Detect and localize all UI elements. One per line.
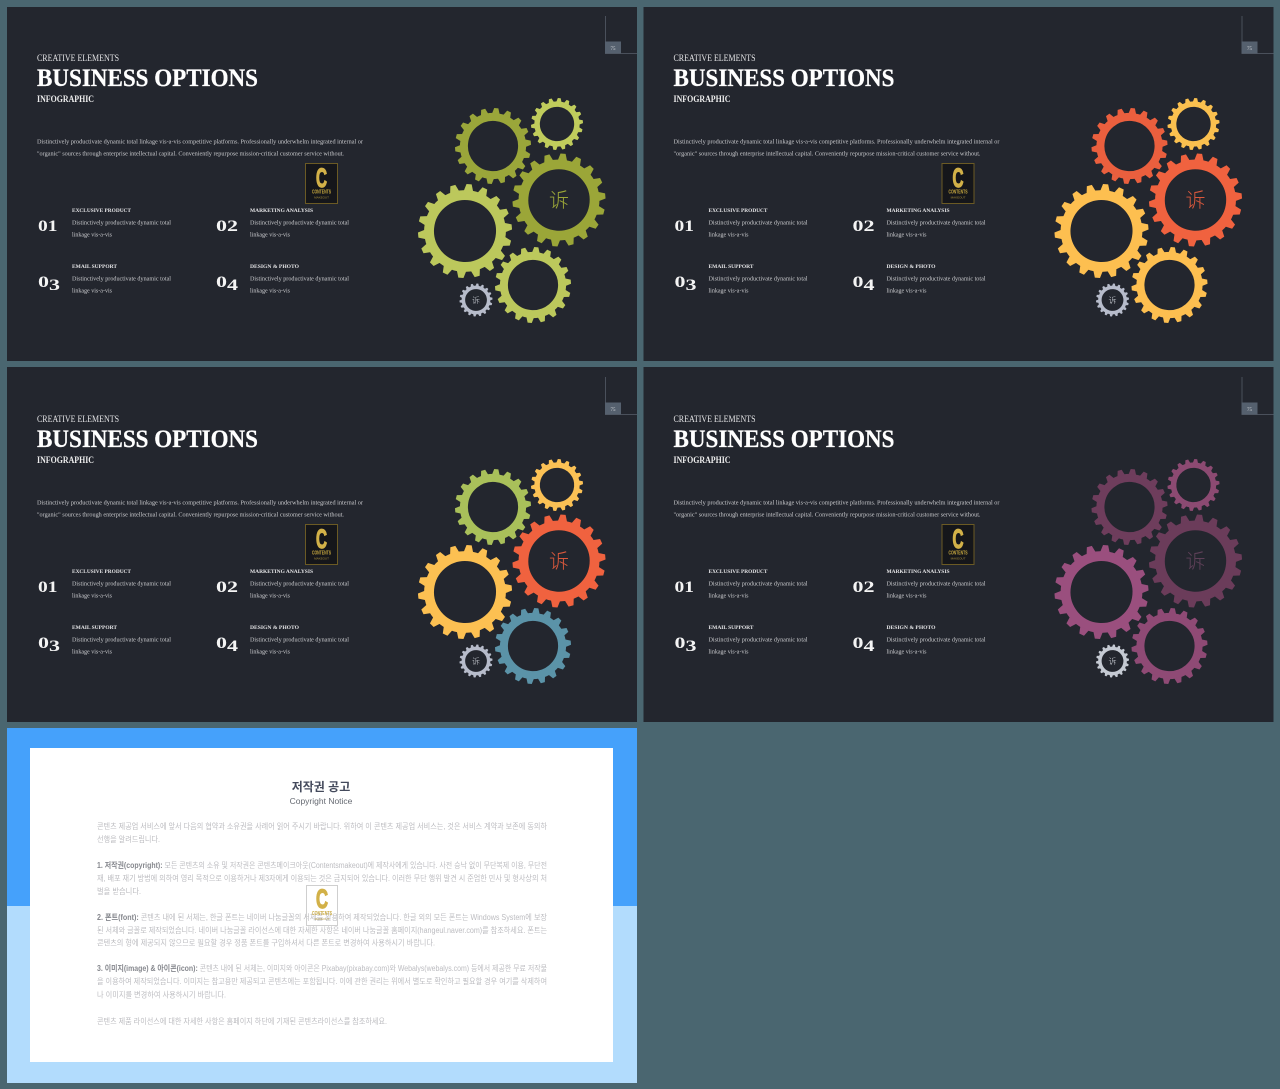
section 1 copyright: 재, 배포 재기 방법에 의하여 영리 목적으로 이용하거나 제3자에게 이용되는 것은 금지되어 있습니다. 이러한 무단 행위 발견 시 준엄한 민사 및 형사상의 처 <box>97 873 547 883</box>
logo <box>942 163 974 204</box>
item 02: MARKETING ANALYSIS <box>250 569 313 575</box>
item 03 <box>674 264 808 294</box>
item 02 <box>852 569 986 600</box>
item 01: EXCLUSIVE PRODUCT <box>72 208 131 214</box>
heading block: BUSINESS OPTIONS <box>37 65 258 92</box>
section 3 image and icon: 나 이미지를 변경하여 사용하시기 바랍니다. <box>97 990 226 1000</box>
section 2 font: 된 서체와 글꼴로 제작되었습니다. 네이버 나눔글꼴 라이선스에 대한 자세한 사항은 네이버 나눔글꼴 홈페이지(hangeul.naver.com)를 참조하세요. 폰트는 <box>97 925 547 935</box>
intro paragraph: Distinctively productivate dynamic total linkage vis-a-vis competitive platforms. Professionally underwhelm integrated internal or <box>674 138 1000 146</box>
logo: MAKEOUT <box>315 917 330 921</box>
item 01: Distinctively productivate dynamic total <box>72 582 171 588</box>
item 04: DESIGN & PHOTO <box>886 625 936 631</box>
logo: CONTENTS <box>312 190 331 196</box>
logo <box>942 524 974 564</box>
item 01: EXCLUSIVE PRODUCT <box>708 569 768 575</box>
item 04 <box>852 625 986 656</box>
logo: C <box>316 163 327 193</box>
item 03 <box>674 625 808 656</box>
item 02: linkage vis-a-vis <box>250 232 291 238</box>
logo: MAKEOUT <box>314 556 329 560</box>
section 2 font: 2. 폰트(font): 콘텐츠 내에 된 서체는, 한글 폰트는 네이버 나눔글꼴의 서체를 활용하여 제작되었습니다. 한글 외의 모든 폰트는 Windows System에 보장 <box>97 912 548 922</box>
item 02: MARKETING ANALYSIS <box>250 208 313 214</box>
heading block <box>37 415 258 465</box>
section 1 copyright: 벌을 받습니다. <box>97 886 141 896</box>
page number corner <box>605 377 637 414</box>
item 01 <box>38 208 171 238</box>
gear cluster: 诉 <box>549 545 569 574</box>
item 01: linkage vis-a-vis <box>72 594 113 600</box>
gear cluster <box>1040 92 1257 332</box>
gear cluster: 诉 <box>1186 184 1206 213</box>
copyright title: 저작권 공고 <box>292 779 350 794</box>
item 04: DESIGN & PHOTO <box>250 264 300 270</box>
heading block: INFOGRAPHIC <box>37 455 94 465</box>
item 01: linkage vis-a-vis <box>72 232 113 238</box>
item 04: Distinctively productivate dynamic total <box>250 638 349 644</box>
heading block <box>674 415 894 465</box>
item 02: 02 <box>216 579 238 596</box>
gear cluster: 诉 <box>472 656 480 667</box>
gear cluster: 诉 <box>1108 295 1116 306</box>
intro paragraph: "organic" sources through enterprise intellectual capital. Conveniently repurpose mission-critical customer service without. <box>37 512 344 518</box>
heading block <box>37 54 258 104</box>
item 04: Distinctively productivate dynamic total <box>886 276 986 282</box>
item 04 <box>216 264 349 294</box>
item 04: 4 <box>864 638 874 655</box>
item 04: linkage vis-a-vis <box>886 650 927 656</box>
item 03: linkage vis-a-vis <box>708 288 749 294</box>
page number corner: 75 <box>610 408 616 413</box>
copyright title <box>290 779 353 806</box>
item 02: 02 <box>216 218 238 235</box>
logo: CONTENTS <box>948 550 968 556</box>
item 03: Distinctively productivate dynamic total <box>708 638 808 644</box>
intro text <box>97 821 548 844</box>
item 04: 4 <box>864 277 874 294</box>
item 02: linkage vis-a-vis <box>886 232 927 238</box>
heading block: CREATIVE ELEMENTS <box>674 54 756 64</box>
heading block: INFOGRAPHIC <box>674 94 730 104</box>
logo: CONTENTS <box>312 911 332 917</box>
heading block: BUSINESS OPTIONS <box>674 65 894 92</box>
item 04: 0 <box>216 635 224 652</box>
item 04: DESIGN & PHOTO <box>250 625 300 631</box>
item 04: 0 <box>852 635 860 652</box>
logo: C <box>316 524 327 554</box>
panel: plum gears slide <box>644 367 1274 722</box>
heading block: CREATIVE ELEMENTS <box>674 415 756 425</box>
item 03: 0 <box>38 274 46 291</box>
logo: C <box>316 884 328 914</box>
gear cluster <box>1040 453 1257 693</box>
panel: copyright notice <box>7 728 637 1083</box>
item 03: linkage vis-a-vis <box>708 650 749 656</box>
section 1 copyright: 1. 저작권(copyright): 모든 콘텐츠의 소유 및 저작권은 콘텐츠메이크아웃(Contentsmakeout)에 제작사에게 있습니다. 사전 승낙 없이 무단복제 이용, 무단전 <box>97 860 547 870</box>
item 04: linkage vis-a-vis <box>250 650 291 656</box>
item 02: Distinctively productivate dynamic total <box>250 220 349 226</box>
heading block: INFOGRAPHIC <box>674 455 730 465</box>
item 02: 02 <box>852 218 874 235</box>
item 03: linkage vis-a-vis <box>72 288 113 294</box>
logo <box>306 884 338 926</box>
item 02: Distinctively productivate dynamic total <box>250 582 349 588</box>
copyright title: Copyright Notice <box>290 796 353 806</box>
section 1 copyright <box>97 860 547 896</box>
item 01: EXCLUSIVE PRODUCT <box>708 208 768 214</box>
heading block: CREATIVE ELEMENTS <box>37 415 119 425</box>
item 03: linkage vis-a-vis <box>72 650 113 656</box>
intro paragraph <box>37 500 364 518</box>
item 04 <box>216 625 349 656</box>
page number corner <box>605 16 637 54</box>
item 01: 01 <box>674 218 694 235</box>
panel: red and yellow gears slide <box>644 7 1274 361</box>
section 2 font <box>97 912 548 948</box>
item 03: 3 <box>686 277 696 294</box>
item 02 <box>216 569 349 600</box>
section 3 image and icon <box>97 963 547 1000</box>
item 04: linkage vis-a-vis <box>250 288 291 294</box>
item 01: linkage vis-a-vis <box>708 232 749 238</box>
item 03: Distinctively productivate dynamic total <box>708 276 808 282</box>
heading block <box>674 54 894 104</box>
section 3 image and icon: 을 이용하여 제작되었습니다. 이미지는 참고용만 제공되고 콘텐츠에는 포함됩니다. 이에 관한 권리는 위에서 별도로 확인하고 필요할 경우 여기를 삭제하여 <box>97 976 547 986</box>
panel: multicolour gears slide <box>7 367 637 722</box>
logo <box>306 163 338 204</box>
item 03: 3 <box>686 638 696 655</box>
item 03: 3 <box>49 638 60 655</box>
gear cluster <box>403 453 620 693</box>
section 3 image and icon: 3. 이미지(image) & 아이콘(icon): 콘텐츠 내에 된 서체는, 이미지와 아이콘은 Pixabay(pixabay.com)와 Webalys(webalys.com) 등에서 제공한 무료 저작물 <box>97 963 547 973</box>
item 04: Distinctively productivate dynamic total <box>250 276 349 282</box>
intro text: 콘텐츠 제공업 서비스에 앞서 다음의 협약과 소유권을 사례어 읽어 주시기 바랍니다. 위하여 이 콘텐츠 제공업 서비스는, 것은 서비스 계약과 보존에 동의하 <box>97 821 548 831</box>
section 2 font: 콘텐츠의 형에 제공되지 않으므로 필요할 경우 정품 폰트를 구입하셔서 다른 폰트로 변경하여 사용하시기 바랍니다. <box>97 938 435 948</box>
item 04: linkage vis-a-vis <box>886 288 927 294</box>
intro text: 선행을 알려드립니다. <box>97 834 160 844</box>
item 03: Distinctively productivate dynamic total <box>72 276 171 282</box>
item 04: 4 <box>227 638 238 655</box>
item 02: linkage vis-a-vis <box>250 594 291 600</box>
item 02: linkage vis-a-vis <box>886 594 927 600</box>
heading block: BUSINESS OPTIONS <box>37 426 258 453</box>
item 01: 01 <box>674 579 694 596</box>
intro paragraph: "organic" sources through enterprise intellectual capital. Conveniently repurpose mission-critical customer service without. <box>674 150 981 158</box>
item 01: 01 <box>38 218 58 235</box>
item 01: linkage vis-a-vis <box>708 594 749 600</box>
intro paragraph: "organic" sources through enterprise intellectual capital. Conveniently repurpose mission-critical customer service without. <box>37 150 344 158</box>
item 04: 0 <box>852 274 860 291</box>
logo: C <box>952 524 964 554</box>
intro paragraph <box>674 500 1000 518</box>
logo: CONTENTS <box>948 190 968 196</box>
item 01 <box>674 208 808 238</box>
item 03: EMAIL SUPPORT <box>708 264 754 270</box>
page number corner: 75 <box>1247 47 1252 52</box>
item 02: MARKETING ANALYSIS <box>886 569 950 575</box>
logo: MAKEOUT <box>314 196 329 200</box>
logo <box>306 524 338 564</box>
item 01: Distinctively productivate dynamic total <box>708 582 808 588</box>
item 02 <box>216 208 349 238</box>
intro paragraph: Distinctively productivate dynamic total linkage vis-a-vis competitive platforms. Professionally underwhelm integrated internal or <box>674 500 1000 506</box>
heading block: INFOGRAPHIC <box>37 94 94 104</box>
item 04 <box>852 264 986 294</box>
item 01: 01 <box>38 579 58 596</box>
item 04: Distinctively productivate dynamic total <box>886 638 986 644</box>
item 03: 0 <box>38 635 46 652</box>
gear cluster: 诉 <box>1108 656 1116 667</box>
item 04: 4 <box>227 277 238 294</box>
logo: C <box>952 163 964 193</box>
item 02: Distinctively productivate dynamic total <box>886 582 986 588</box>
item 04: DESIGN & PHOTO <box>886 264 936 270</box>
panel: olive gears slide <box>7 7 637 361</box>
logo: MAKEOUT <box>951 556 966 560</box>
item 03: 0 <box>674 274 682 291</box>
item 03: 0 <box>674 635 682 652</box>
item 03: EMAIL SUPPORT <box>72 264 117 270</box>
gear cluster: 诉 <box>472 295 480 306</box>
heading block: BUSINESS OPTIONS <box>674 426 894 453</box>
item 03: EMAIL SUPPORT <box>708 625 754 631</box>
closing note: 콘텐츠 제품 라이선스에 대한 자세한 사항은 홈페이지 하단에 기재된 콘텐츠라이선스를 참조하세요. <box>97 1016 387 1026</box>
gear cluster: 诉 <box>1186 545 1206 574</box>
page number corner <box>1242 377 1274 414</box>
logo: CONTENTS <box>312 550 331 556</box>
item 02: 02 <box>852 579 874 596</box>
intro paragraph: Distinctively productivate dynamic total linkage vis-a-vis competitive platforms. Professionally underwhelm integrated internal or <box>37 500 364 506</box>
page number corner <box>1242 16 1274 54</box>
heading block: CREATIVE ELEMENTS <box>37 54 119 64</box>
item 03: EMAIL SUPPORT <box>72 625 117 631</box>
gear cluster: 诉 <box>549 184 569 213</box>
item 02 <box>852 208 986 238</box>
intro paragraph <box>674 138 1000 158</box>
item 04: 0 <box>216 274 224 291</box>
gear cluster <box>403 92 620 332</box>
item 01: Distinctively productivate dynamic total <box>708 220 808 226</box>
intro paragraph: "organic" sources through enterprise intellectual capital. Conveniently repurpose mission-critical customer service without. <box>674 512 981 518</box>
item 01: Distinctively productivate dynamic total <box>72 220 171 226</box>
item 02: Distinctively productivate dynamic total <box>886 220 986 226</box>
white card <box>30 748 613 1062</box>
item 01 <box>38 569 171 600</box>
item 03: Distinctively productivate dynamic total <box>72 638 171 644</box>
item 03 <box>38 625 171 656</box>
logo: MAKEOUT <box>951 196 966 200</box>
item 01: EXCLUSIVE PRODUCT <box>72 569 131 575</box>
item 02: MARKETING ANALYSIS <box>886 208 950 214</box>
item 03 <box>38 264 171 294</box>
item 01 <box>674 569 808 600</box>
intro paragraph <box>37 138 364 158</box>
page number corner: 75 <box>1247 408 1252 413</box>
page number corner: 75 <box>610 47 616 52</box>
intro paragraph: Distinctively productivate dynamic total linkage vis-a-vis competitive platforms. Professionally underwhelm integrated internal or <box>37 138 364 146</box>
item 03: 3 <box>49 277 60 294</box>
